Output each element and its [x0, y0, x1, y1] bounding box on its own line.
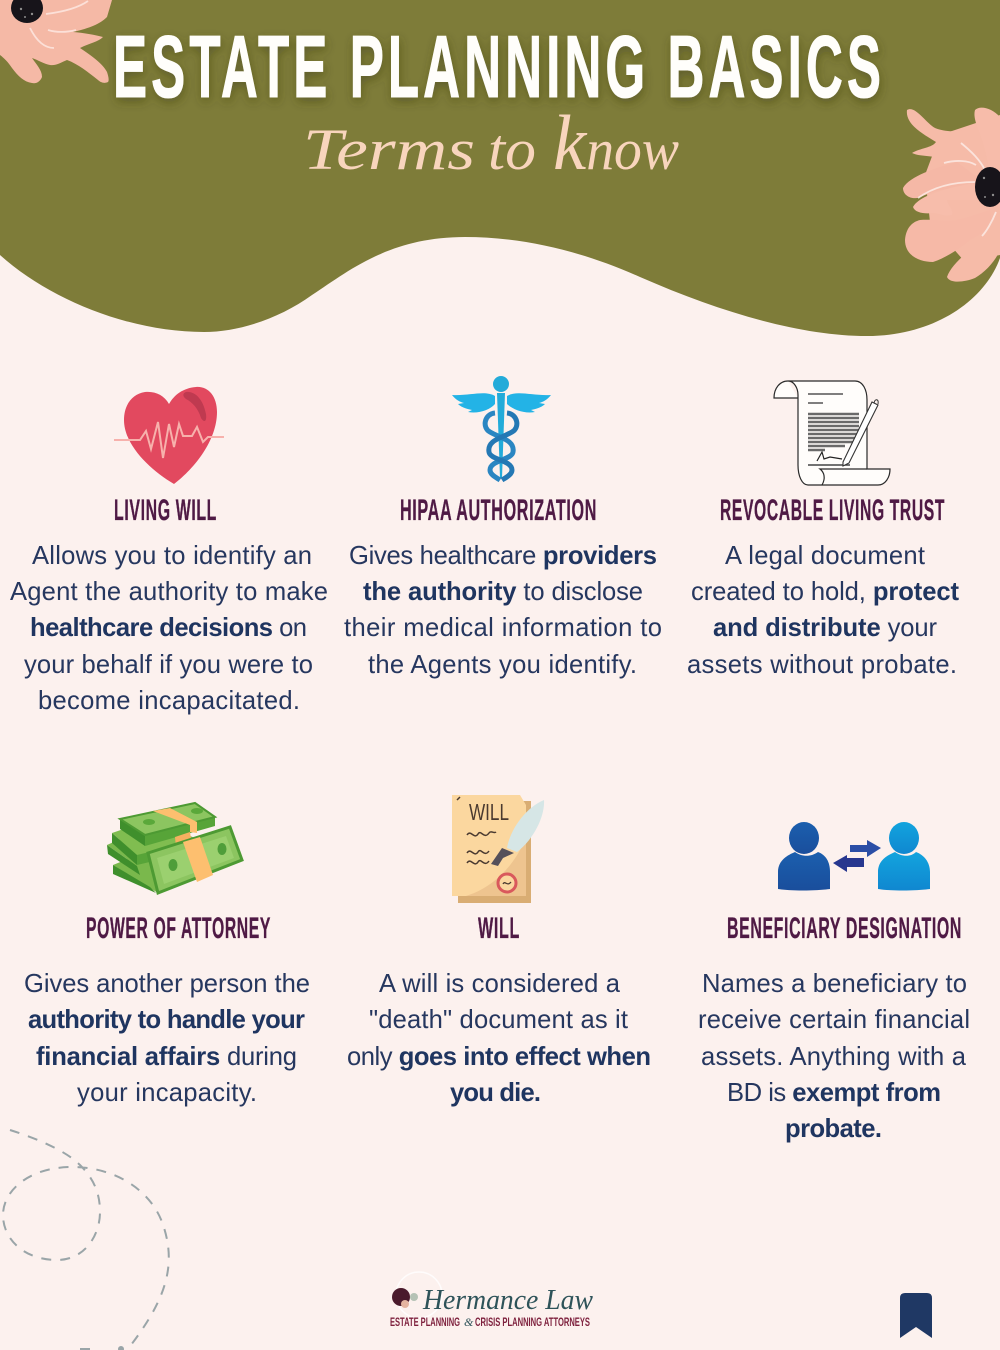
logo flower — [392, 1272, 442, 1318]
description: your incapacity. — [77, 1079, 257, 1107]
description: Names a beneficiary to — [702, 970, 967, 998]
description: Gives another person the — [24, 970, 310, 998]
heading: WILL — [478, 912, 520, 945]
logo — [390, 1272, 594, 1329]
logo tagline — [390, 1315, 590, 1329]
description: Gives healthcare providers — [349, 542, 657, 570]
description: Allows you to identify an — [32, 542, 312, 570]
panel: power of attorney — [24, 803, 310, 1107]
description: your behalf if you were to — [24, 651, 313, 679]
icon: two people exchanging — [778, 822, 930, 890]
description: "death" document as it — [369, 1006, 628, 1034]
heading: POWER OF ATTORNEY — [86, 912, 271, 945]
logo tagline: CRISIS PLANNING ATTORNEYS — [475, 1315, 590, 1329]
description: receive certain financial — [698, 1006, 970, 1034]
description: assets. Anything with a — [701, 1043, 967, 1071]
description: assets without probate. — [687, 651, 957, 679]
flower: top left — [0, 0, 112, 83]
panel: beneficiary designation — [698, 822, 970, 1143]
description: only goes into effect when — [347, 1043, 651, 1071]
description: and distribute your — [713, 614, 937, 642]
subtitle — [303, 99, 679, 186]
panel: living will — [10, 387, 328, 715]
heading: LIVING WILL — [114, 494, 217, 527]
description: become incapacitated. — [38, 687, 300, 715]
description: their medical information to — [344, 614, 662, 642]
icon: heart — [114, 387, 224, 484]
description: A legal document — [725, 542, 925, 570]
description: BD is exempt from — [727, 1079, 941, 1107]
description: the authority to disclose — [363, 578, 643, 606]
icon: scroll and pen — [774, 381, 890, 485]
subtitle: Terms — [303, 117, 475, 182]
flower: right — [903, 108, 1000, 282]
description: you die. — [450, 1079, 541, 1107]
icon: will document and quill — [452, 795, 544, 903]
description: A will is considered a — [379, 970, 621, 998]
dashed spiral — [3, 1130, 169, 1350]
panel: revocable living trust — [687, 381, 959, 679]
description: healthcare decisions on — [30, 614, 307, 642]
icon: money stacks — [107, 803, 242, 893]
panel: will — [347, 795, 651, 1107]
description: created to hold, protect — [691, 578, 959, 606]
description: authority to handle your — [28, 1006, 305, 1034]
description: the Agents you identify. — [368, 651, 637, 679]
description — [10, 542, 328, 715]
heading: HIPAA AUTHORIZATION — [400, 494, 597, 527]
description — [344, 542, 662, 679]
icon: bookmark — [900, 1293, 932, 1338]
description — [347, 970, 651, 1107]
description: probate. — [785, 1115, 882, 1143]
subtitle: know — [553, 99, 679, 186]
description — [24, 970, 310, 1107]
header wave — [0, 0, 1000, 336]
subtitle: to — [488, 117, 536, 182]
logo tagline: & — [464, 1315, 474, 1329]
description: Agent the authority to make — [10, 578, 328, 606]
logo tagline: ESTATE PLANNING — [390, 1315, 460, 1329]
icon: will document and quill: WILL — [469, 799, 509, 825]
description — [698, 970, 970, 1143]
logo name: Hermance Law — [422, 1284, 594, 1316]
description: financial affairs during — [36, 1043, 297, 1071]
panel: hipaa authorization — [344, 376, 662, 679]
description — [687, 542, 959, 679]
icon: caduceus — [452, 376, 551, 480]
